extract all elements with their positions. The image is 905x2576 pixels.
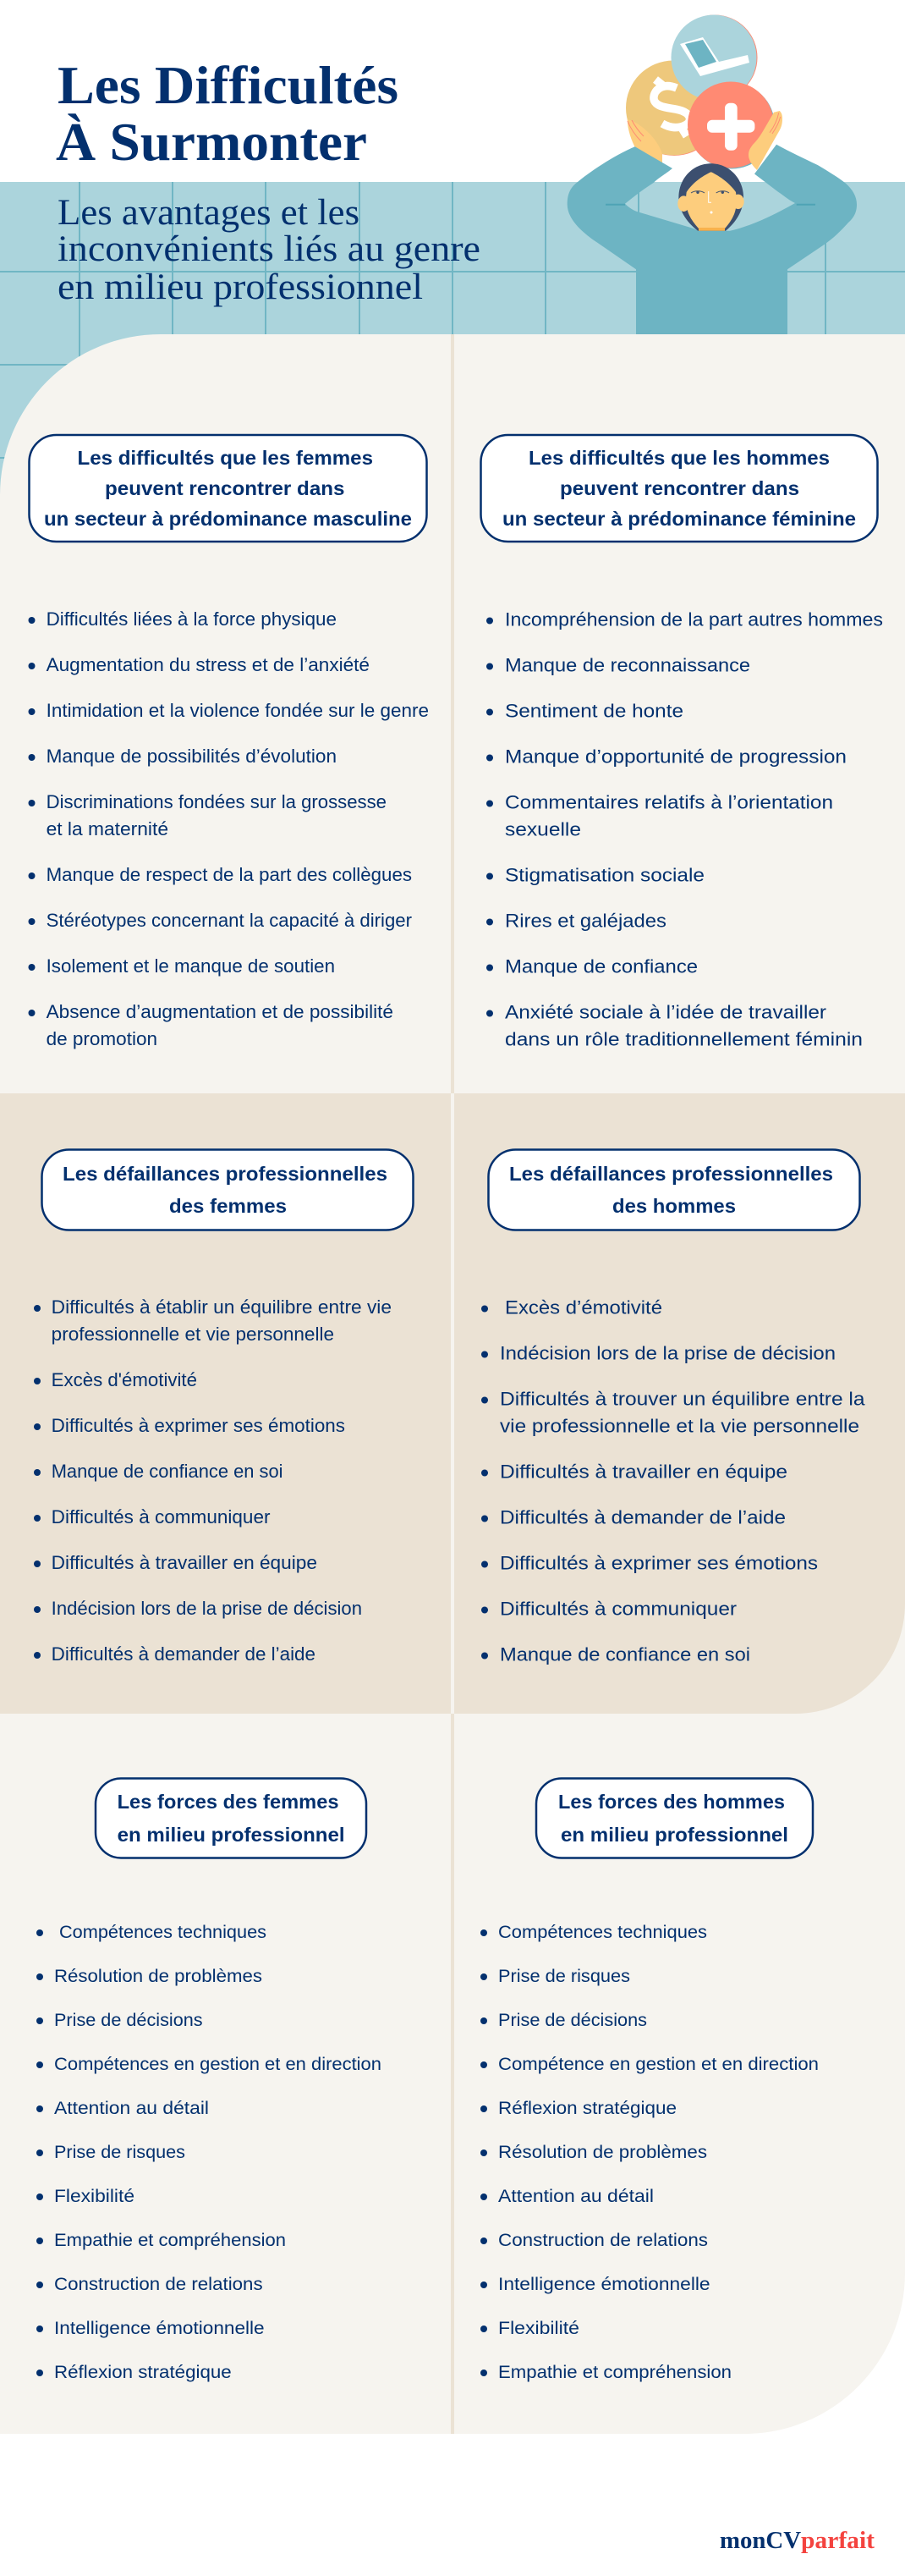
logo: monCVparfait: monCV [720, 2527, 801, 2554]
list: défaillances hommes: Difficultés à demander de l’aide [500, 1506, 786, 1528]
list: difficultés hommes [486, 609, 883, 1049]
heading pill: forces femmes: en milieu professionnel [118, 1824, 345, 1846]
left hand [628, 119, 662, 164]
list: difficultés hommes: dans un rôle traditionnellement féminin [505, 1029, 863, 1049]
heading pill: difficultés hommes: Les difficultés que les hommes [529, 447, 830, 469]
subtitle [58, 193, 480, 307]
logo: monCVparfait: parfait [801, 2527, 875, 2554]
list: forces femmes: Compétences en gestion et en direction [54, 2055, 381, 2074]
list: défaillances hommes: Difficultés à trouver un équilibre entre la [500, 1388, 865, 1410]
list: défaillances hommes: Difficultés à communiquer [500, 1598, 737, 1620]
subtitle: Les avantages et les [58, 193, 359, 233]
header band with grid background [0, 182, 905, 499]
panel: défaillances hommes [481, 1149, 865, 1665]
list: forces femmes: Prise de décisions [54, 2011, 203, 2030]
list: forces femmes [36, 1923, 381, 2382]
heading pill: difficultés femmes [29, 435, 426, 542]
heading pill: difficultés femmes: peuvent rencontrer dans [105, 477, 345, 499]
list: difficultés femmes: Intimidation et la violence fondée sur le genre [47, 700, 429, 721]
list: difficultés femmes: Stéréotypes concernant la capacité à diriger [47, 910, 412, 931]
head [677, 163, 744, 231]
list: difficultés hommes: Incompréhension de la part autres hommes [505, 609, 883, 630]
heading pill: défaillances femmes: des femmes [169, 1195, 287, 1217]
list: difficultés hommes: Sentiment de honte [505, 701, 683, 721]
list: défaillances femmes: Excès d'émotivité [52, 1369, 197, 1390]
list: difficultés femmes: Difficultés liées à la force physique [47, 608, 337, 630]
list: défaillances hommes: Indécision lors de la prise de décision [500, 1342, 836, 1364]
list: défaillances femmes: Difficultés à travailler en équipe [52, 1552, 317, 1573]
logo: monCVparfait [720, 2527, 875, 2554]
icon: laptop circle [672, 15, 758, 100]
list: forces hommes: Construction de relations [498, 2231, 708, 2250]
list: forces femmes: Construction de relations [54, 2275, 263, 2294]
heading pill: défaillances hommes [489, 1149, 859, 1230]
list: défaillances femmes: Difficultés à établir un équilibre entre vie [52, 1296, 392, 1318]
list: difficultés hommes: Manque de confiance [505, 956, 698, 977]
list: défaillances hommes: Excès d’émotivité [505, 1296, 662, 1318]
list: forces hommes: Empathie et compréhension [498, 2363, 732, 2382]
heading pill: difficultés hommes: peuvent rencontrer dans [560, 477, 799, 499]
list: défaillances femmes: Manque de confiance en soi [52, 1461, 282, 1482]
list: forces femmes: Prise de risques [54, 2143, 185, 2162]
list: forces hommes [480, 1923, 819, 2382]
list: forces hommes: Compétences techniques [498, 1923, 707, 1942]
heading pill: difficultés femmes: Les difficultés que les femmes [78, 447, 373, 469]
heading pill: difficultés hommes [480, 435, 878, 542]
list: difficultés femmes: Isolement et le manque de soutien [47, 955, 335, 977]
list: difficultés hommes: Anxiété sociale à l’idée de travailler [505, 1002, 826, 1022]
list: forces femmes: Attention au détail [54, 2099, 209, 2118]
list: défaillances hommes: vie professionnelle et la vie personnelle [500, 1415, 859, 1437]
list: défaillances femmes: Indécision lors de la prise de décision [52, 1598, 362, 1619]
heading pill: défaillances hommes: Les défaillances professionnelles [509, 1163, 833, 1185]
subtitle: en milieu professionnel [58, 267, 423, 307]
sweater body and arms [568, 145, 857, 334]
list: forces hommes: Flexibilité [498, 2319, 579, 2338]
list: difficultés femmes: Manque de respect de la part des collègues [47, 864, 412, 885]
list: forces femmes: Compétences techniques [59, 1923, 266, 1942]
list: forces hommes: Résolution de problèmes [498, 2143, 707, 2162]
list: difficultés hommes: Stigmatisation sociale [505, 865, 705, 885]
list: difficultés hommes: sexuelle [505, 819, 581, 839]
list: défaillances femmes: Difficultés à demander de l’aide [52, 1643, 315, 1665]
list: défaillances hommes: Difficultés à travailler en équipe [500, 1461, 787, 1483]
title [56, 55, 398, 172]
list: forces hommes: Réflexion stratégique [498, 2099, 677, 2118]
heading pill: forces hommes: Les forces des hommes [558, 1791, 785, 1813]
list: forces hommes: Prise de risques [498, 1967, 630, 1986]
right hand [749, 111, 782, 170]
icon: medical cross circle [688, 81, 775, 169]
list: forces hommes: Compétence en gestion et en direction [498, 2055, 819, 2074]
list: défaillances hommes: Manque de confiance en soi [500, 1643, 750, 1665]
list: défaillances hommes: Difficultés à exprimer ses émotions [500, 1552, 818, 1574]
panel: défaillances femmes [34, 1149, 413, 1665]
heading pill: défaillances hommes: des hommes [612, 1195, 736, 1217]
arm crease lines [606, 204, 815, 206]
panel: forces hommes [480, 1779, 819, 2382]
list: forces hommes: Intelligence émotionnelle [498, 2275, 710, 2294]
heading pill: forces hommes [536, 1779, 813, 1858]
list: défaillances hommes [481, 1296, 865, 1665]
list: difficultés femmes [29, 608, 429, 1049]
heading pill: défaillances femmes: Les défaillances professionnelles [63, 1163, 387, 1185]
list: difficultés hommes: Rires et galéjades [505, 911, 666, 931]
heading pill: difficultés hommes: un secteur à prédominance féminine [502, 508, 856, 530]
list: difficultés femmes: et la maternité [47, 818, 168, 839]
column divider [451, 334, 454, 2434]
list: défaillances femmes: Difficultés à communiquer [52, 1506, 270, 1527]
list: défaillances femmes: Difficultés à exprimer ses émotions [52, 1415, 345, 1436]
panel: difficultés hommes [480, 435, 883, 1049]
heading pill: défaillances femmes [42, 1149, 413, 1230]
heading pill: forces hommes: en milieu professionnel [561, 1824, 788, 1846]
panel: forces femmes [36, 1779, 381, 2382]
panel: difficultés femmes [29, 435, 429, 1049]
tan section background [0, 1093, 905, 1714]
list: difficultés femmes: Augmentation du stress et de l’anxiété [47, 654, 370, 675]
list: difficultés femmes: Manque de possibilités d’évolution [47, 746, 337, 767]
list: difficultés femmes: Discriminations fondées sur la grossesse [47, 791, 387, 812]
list: forces femmes: Résolution de problèmes [54, 1967, 262, 1986]
icon: dollar coin [626, 61, 721, 156]
subtitle: inconvénients liés au genre [58, 229, 480, 269]
heading pill: difficultés femmes: un secteur à prédominance masculine [44, 508, 412, 530]
list: difficultés femmes: Absence d’augmentation et de possibilité [47, 1001, 393, 1022]
title: À Surmonter [56, 112, 367, 172]
illustration: person balancing three circles [568, 15, 857, 334]
list: difficultés hommes: Manque de reconnaissance [505, 655, 750, 675]
list: difficultés femmes: de promotion [47, 1028, 157, 1049]
title: Les Difficultés [58, 55, 398, 115]
heading pill: forces femmes: Les forces des femmes [118, 1791, 339, 1813]
list: forces femmes: Empathie et compréhension [54, 2231, 286, 2250]
list: forces femmes: Flexibilité [54, 2187, 134, 2206]
heading pill: forces femmes [96, 1779, 366, 1858]
list: difficultés hommes: Commentaires relatifs à l’orientation [505, 792, 833, 812]
list: forces femmes: Réflexion stratégique [54, 2363, 232, 2382]
list: difficultés hommes: Manque d’opportunité de progression [505, 746, 847, 767]
list: défaillances femmes [34, 1296, 392, 1665]
list: forces femmes: Intelligence émotionnelle [54, 2319, 265, 2338]
list: défaillances femmes: professionnelle et vie personnelle [52, 1324, 334, 1345]
list: forces hommes: Attention au détail [498, 2187, 654, 2206]
list: forces hommes: Prise de décisions [498, 2011, 647, 2030]
